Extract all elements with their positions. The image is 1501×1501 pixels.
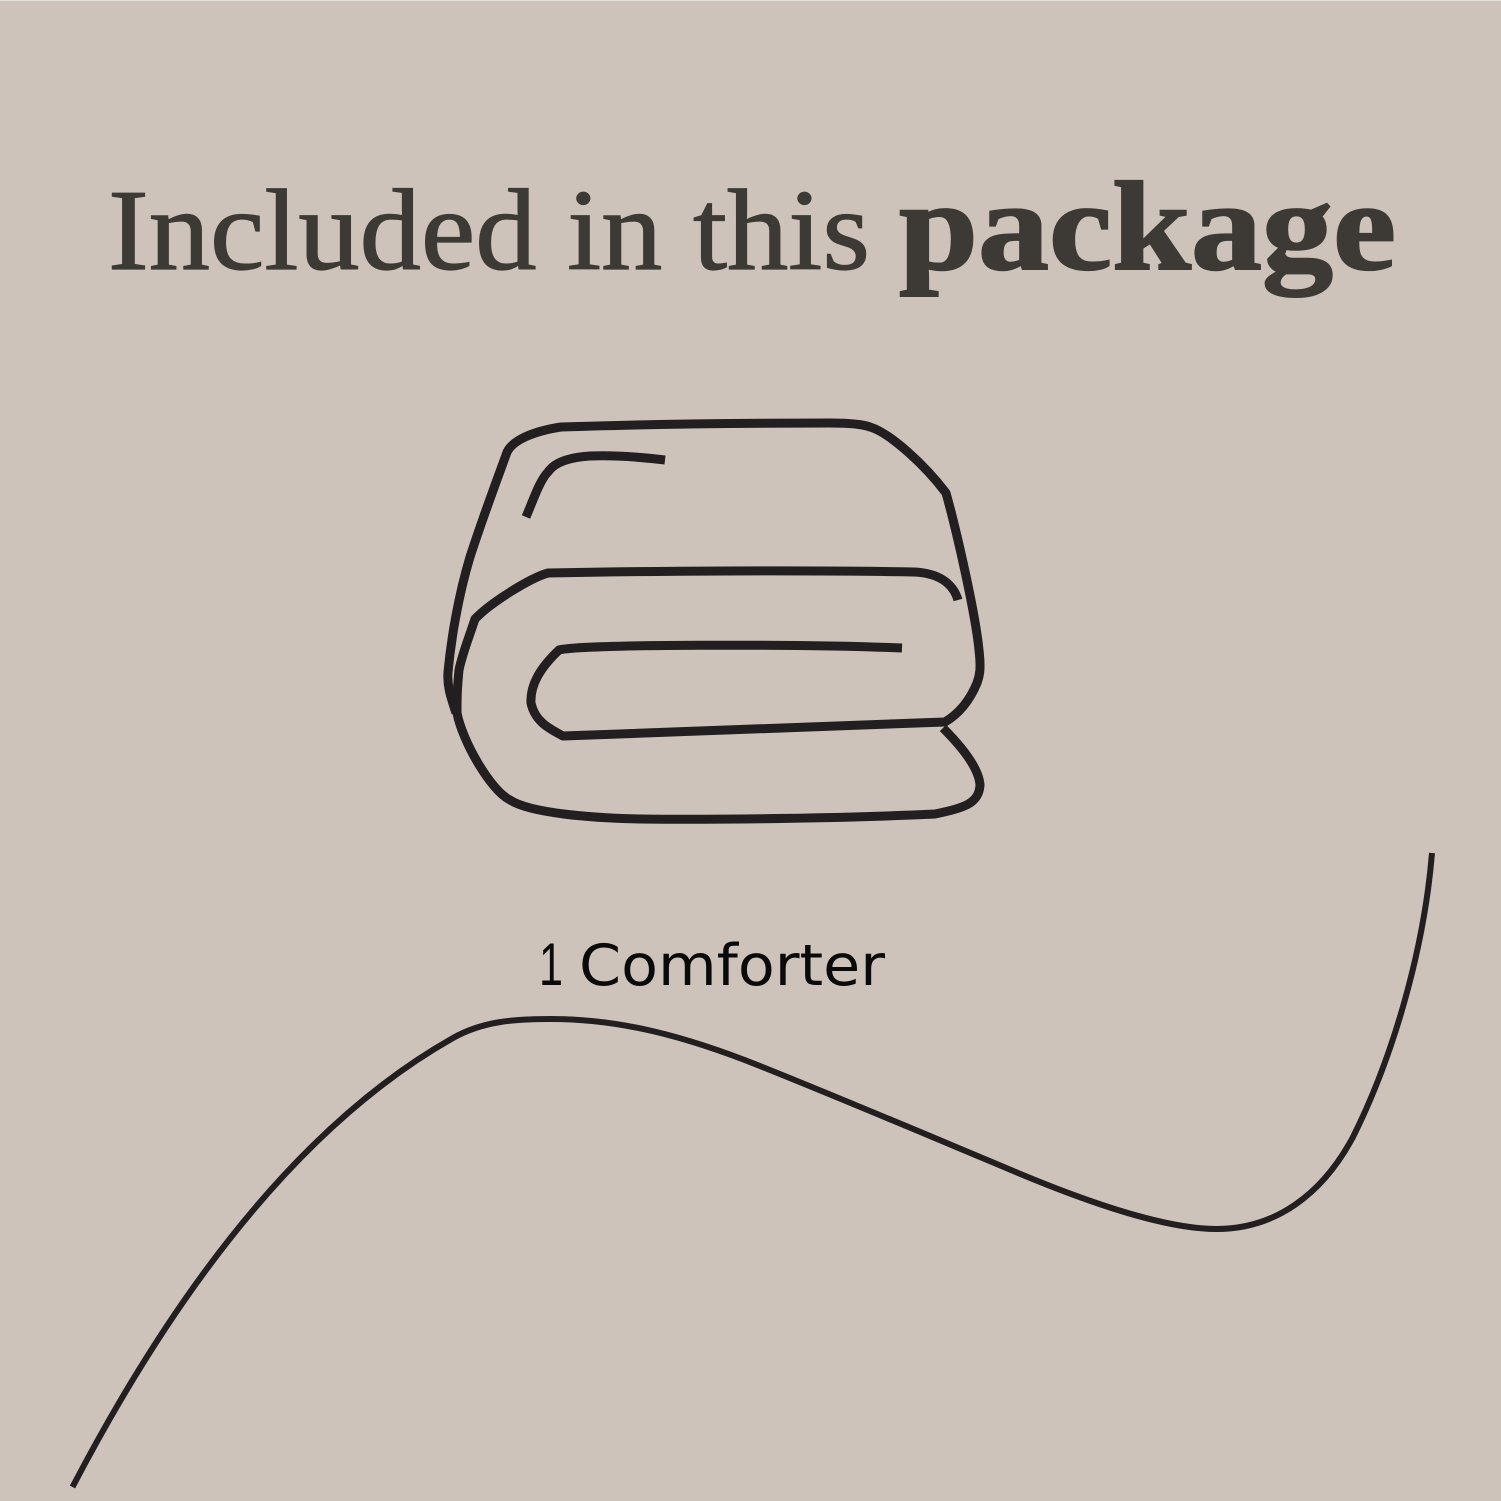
icon: folded comforter — [448, 423, 980, 819]
decorative curve — [72, 853, 1432, 1487]
label: 1 Comforter: Comforter — [579, 933, 886, 999]
label: 1 Comforter: 1 — [539, 931, 563, 998]
title: Included in this — [108, 167, 870, 295]
title: package — [899, 157, 1396, 297]
title — [108, 157, 1396, 297]
